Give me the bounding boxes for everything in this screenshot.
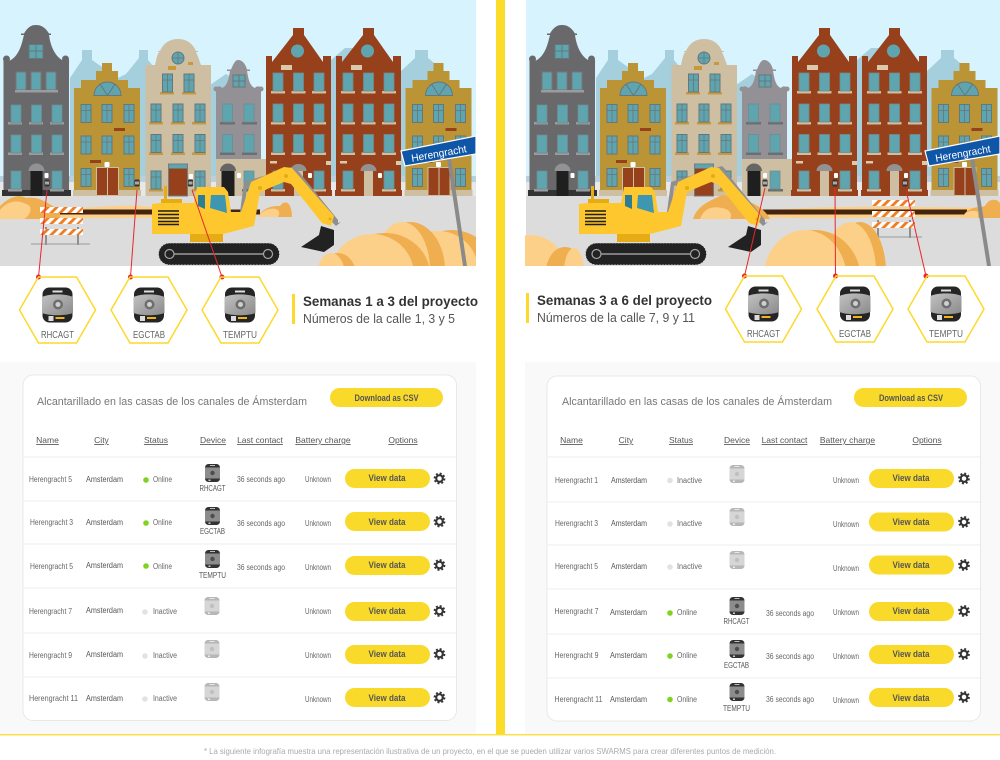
row: Herengracht 3 inactive: Herengracht 3 (555, 519, 598, 528)
row: Herengracht 3 online EGCTAB (30, 507, 444, 536)
street sign Herengracht right: Herengracht (934, 143, 992, 165)
download button left: Download as CSV (354, 393, 418, 403)
row: Herengracht 1 inactive: Inactive (677, 476, 702, 485)
row: Herengracht 11 inactive: View data (368, 693, 406, 703)
download button left (330, 388, 443, 407)
row: Herengracht 9 online EGCTAB: Online (677, 651, 697, 660)
row: Herengracht 7 online RHCAGT (554, 597, 969, 626)
row: Herengracht 5 online RHCAGT (29, 464, 444, 493)
row: Herengracht 3 inactive: Inactive (677, 519, 702, 528)
red connector lines left (36, 190, 224, 280)
row: Herengracht 9 inactive: Inactive (153, 651, 177, 660)
hexagon: EGCTAB right (817, 276, 893, 342)
heading right: Semanas 3 a 6 del proyecto (537, 292, 712, 308)
row: Herengracht 11 inactive: Herengracht 11 (29, 694, 78, 703)
row: Herengracht 7 online RHCAGT: Unknown (833, 608, 859, 617)
street sign pole left (447, 158, 467, 266)
row: Herengracht 5 inactive: Herengracht 5 (555, 562, 598, 571)
scene: right street (525, 0, 1000, 266)
row: Herengracht 5 online TEMPTU: Herengracht 5 (30, 562, 73, 571)
row: Herengracht 5 online RHCAGT: Unknown (305, 475, 331, 484)
hexagon: EGCTAB right: EGCTAB (839, 329, 871, 340)
row: Herengracht 7 inactive: Unknown (305, 607, 331, 616)
big sand pile right (318, 222, 476, 266)
trench right (755, 207, 1000, 218)
row: Herengracht 11 online TEMPTU: Online (677, 695, 697, 704)
row: Herengracht 9 online EGCTAB: Herengracht 9 (554, 651, 599, 660)
excavator right (579, 166, 768, 265)
row: Herengracht 7 online RHCAGT: Online (677, 608, 697, 617)
row: Herengracht 1 inactive: Amsterdam (611, 476, 647, 485)
row: Herengracht 11 online TEMPTU: Unknown (833, 696, 859, 705)
excavator left (152, 166, 341, 265)
hexagon: TEMPTU right: TEMPTU (929, 329, 963, 340)
road barrier left (31, 207, 90, 245)
street sign pole right (970, 158, 991, 266)
heading right: Números de la calle 7, 9 y 11 (537, 310, 695, 325)
row: Herengracht 11 inactive (29, 683, 444, 707)
sand pile bottom left (525, 235, 584, 266)
row: Herengracht 5 online RHCAGT: 36 seconds ago (237, 475, 285, 484)
row: Herengracht 7 inactive: Amsterdam (86, 606, 123, 615)
row: Herengracht 11 online TEMPTU: View data (892, 693, 930, 703)
sand pile left (0, 196, 60, 219)
mounted sensors left (44, 180, 193, 186)
table header right: Options (912, 435, 942, 445)
row: Herengracht 11 online TEMPTU: Herengracht 11 (554, 695, 603, 704)
heading left (292, 293, 478, 326)
table header right: City (619, 435, 634, 445)
download button right (854, 388, 967, 407)
table title left: Alcantarillado en las casas de los canales de Ámsterdam (37, 395, 307, 408)
heading left: Semanas 1 a 3 del proyecto (303, 293, 478, 309)
row: Herengracht 11 online TEMPTU: Amsterdam (610, 695, 647, 704)
row: Herengracht 7 online RHCAGT: Amsterdam (610, 608, 647, 617)
hexagon: RHCAGT right: RHCAGT (747, 329, 780, 340)
row: Herengracht 3 online EGCTAB: Amsterdam (86, 518, 123, 527)
row: Herengracht 9 inactive: View data (368, 649, 406, 659)
row: Herengracht 9 online EGCTAB (554, 640, 969, 670)
row: Herengracht 7 online RHCAGT: View data (892, 606, 930, 616)
row: Herengracht 3 inactive (555, 508, 969, 532)
small sand pile (258, 202, 292, 217)
hexagon: RHCAGT left (20, 277, 96, 343)
table header left: Battery charge (295, 435, 351, 445)
row: Herengracht 5 inactive: View data (892, 560, 930, 570)
row: Herengracht 3 online EGCTAB: Unknown (305, 519, 331, 528)
hexagon: TEMPTU left (202, 277, 278, 343)
street sign Herengracht left (401, 136, 476, 166)
street sign Herengracht right (925, 136, 1000, 166)
row: Herengracht 9 inactive (29, 640, 444, 664)
mounted sensors right (762, 180, 908, 186)
sand pile behind excavator (693, 195, 770, 219)
big sand pile centre (764, 222, 886, 266)
yellow centre divider (496, 0, 505, 735)
panel: right dashboard (525, 362, 1000, 734)
row: Herengracht 5 online TEMPTU: TEMPTU (199, 571, 226, 580)
row: Herengracht 3 online EGCTAB: Online (153, 518, 172, 527)
row separators left (23, 457, 456, 677)
table header left: Last contact (237, 435, 284, 445)
row: Herengracht 5 online TEMPTU: Amsterdam (86, 561, 123, 570)
row: Herengracht 3 online EGCTAB: View data (368, 517, 406, 527)
hexagon: RHCAGT right (726, 276, 802, 342)
row: Herengracht 5 online RHCAGT: Amsterdam (86, 475, 123, 484)
row: Herengracht 7 online RHCAGT: 36 seconds ago (766, 609, 814, 618)
hexagon: EGCTAB left (111, 277, 187, 343)
row: Herengracht 5 inactive: Inactive (677, 562, 702, 571)
table header left (36, 435, 418, 445)
hexagon: TEMPTU right (908, 276, 984, 342)
row: Herengracht 5 online TEMPTU: View data (368, 560, 406, 570)
row: Herengracht 5 online RHCAGT: Online (153, 475, 172, 484)
table header left: Device (200, 435, 226, 445)
heading right (526, 292, 712, 325)
row: Herengracht 3 online EGCTAB: EGCTAB (200, 527, 225, 536)
row: Herengracht 5 online TEMPTU: Unknown (305, 563, 331, 572)
row: Herengracht 9 inactive: Unknown (305, 651, 331, 660)
heading left: Números de la calle 1, 3 y 5 (303, 311, 455, 326)
row: Herengracht 11 inactive: Unknown (305, 695, 331, 704)
row: Herengracht 9 online EGCTAB: EGCTAB (724, 661, 749, 670)
row: Herengracht 7 inactive: Inactive (153, 607, 177, 616)
row: Herengracht 3 online EGCTAB: Herengracht 3 (30, 518, 73, 527)
row: Herengracht 7 inactive: Herengracht 7 (29, 607, 72, 616)
row: Herengracht 11 inactive: Amsterdam (86, 694, 123, 703)
table header right: Name (560, 435, 583, 445)
row: Herengracht 5 inactive: Unknown (833, 564, 859, 573)
row: Herengracht 9 online EGCTAB: View data (892, 649, 930, 659)
table header right (560, 435, 942, 445)
row: Herengracht 9 inactive: Herengracht 9 (29, 651, 72, 660)
hexagon: RHCAGT left: RHCAGT (41, 330, 74, 341)
row: Herengracht 1 inactive (555, 465, 969, 488)
row: Herengracht 11 online TEMPTU: 36 seconds ago (766, 695, 814, 704)
row: Herengracht 7 online RHCAGT: Herengracht 7 (554, 607, 599, 616)
row: Herengracht 5 online TEMPTU (30, 550, 444, 580)
sand pile far right (962, 200, 1000, 218)
row: Herengracht 7 inactive: View data (368, 606, 406, 616)
red connector lines right (742, 188, 928, 278)
row: Herengracht 1 inactive: Herengracht 1 (555, 476, 598, 485)
table header right: Last contact (762, 435, 808, 445)
table header left: City (94, 435, 110, 445)
table header left: Name (36, 435, 59, 445)
row: Herengracht 7 online RHCAGT: RHCAGT (724, 617, 750, 626)
row: Herengracht 9 inactive: Amsterdam (86, 650, 123, 659)
row: Herengracht 3 inactive: Amsterdam (611, 519, 647, 528)
table header left: Options (388, 435, 418, 445)
table header right: Battery charge (820, 435, 875, 445)
row: Herengracht 9 online EGCTAB: 36 seconds ago (766, 652, 814, 661)
row: Herengracht 9 online EGCTAB: Unknown (833, 652, 859, 661)
row: Herengracht 9 online EGCTAB: Amsterdam (610, 651, 647, 660)
trench left (40, 206, 260, 218)
row: Herengracht 3 inactive: View data (892, 517, 930, 527)
panel: left dashboard (0, 362, 476, 734)
row: Herengracht 3 online EGCTAB: 36 seconds ago (237, 519, 285, 528)
table title right: Alcantarillado en las casas de los canales de Ámsterdam (562, 395, 832, 408)
row: Herengracht 3 inactive: Unknown (833, 520, 859, 529)
hexagon: EGCTAB left: EGCTAB (133, 330, 165, 341)
row: Herengracht 11 inactive: Inactive (153, 694, 177, 703)
table header left: Status (144, 435, 168, 445)
row: Herengracht 7 inactive (29, 597, 444, 621)
row: Herengracht 5 inactive: Amsterdam (611, 562, 647, 571)
row: Herengracht 5 online TEMPTU: Online (153, 562, 172, 571)
table header right: Device (724, 435, 750, 445)
row: Herengracht 1 inactive: View data (892, 473, 930, 483)
row: Herengracht 5 online RHCAGT: Herengracht 5 (29, 475, 72, 484)
row: Herengracht 11 online TEMPTU (554, 683, 969, 713)
row: Herengracht 5 online RHCAGT: View data (368, 473, 406, 483)
row: Herengracht 1 inactive: Unknown (833, 476, 859, 485)
scene: left street (0, 0, 476, 266)
download button right: Download as CSV (879, 393, 943, 403)
row: Herengracht 5 inactive (555, 551, 969, 574)
table header right: Status (669, 435, 693, 445)
row: Herengracht 5 online RHCAGT: RHCAGT (200, 484, 226, 493)
hexagon: TEMPTU left: TEMPTU (223, 330, 257, 341)
road barrier right (872, 200, 922, 238)
row: Herengracht 11 online TEMPTU: TEMPTU (723, 704, 750, 713)
row: Herengracht 5 online TEMPTU: 36 seconds ago (237, 563, 285, 572)
row separators right (547, 457, 980, 678)
yellow footer rule (0, 734, 1000, 736)
footnote: * La siguiente infografía muestra una representación ilustrativa de un proyecto, en el que se pueden utilizar varios SWARMS para crear diferentes puntos de medición. (204, 746, 776, 756)
street sign Herengracht left: Herengracht (410, 143, 468, 165)
